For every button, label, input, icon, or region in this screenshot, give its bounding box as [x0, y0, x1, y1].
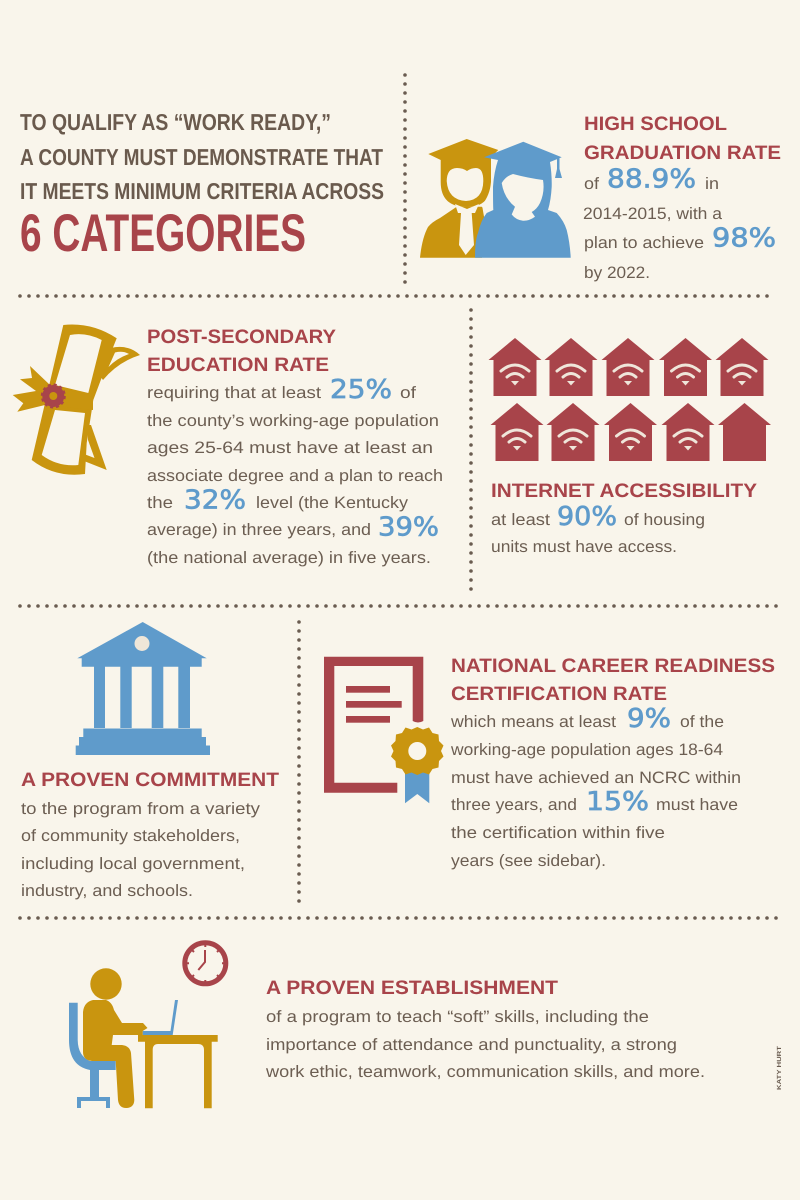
text: a proven establishment: A PROVEN ESTABLISHMENT [266, 977, 558, 999]
text: a proven commitment: including local government, [21, 855, 245, 873]
text: internet accessibility [491, 480, 757, 556]
text: a proven commitment: of community stakeholders, [21, 827, 240, 845]
icon: diploma [13, 325, 140, 475]
text: national career readiness certification rate: years (see sidebar). [451, 852, 606, 870]
text: post-secondary education rate: level (the Kentucky [256, 494, 409, 512]
text: national career readiness certification rate: must have [656, 796, 738, 814]
text: a proven commitment: to the program from a variety [21, 800, 261, 818]
text: national career readiness certification rate: NATIONAL CAREER READINESS [451, 655, 775, 677]
text: high school graduation rate [583, 113, 781, 282]
text: post-secondary education rate: the [147, 494, 173, 512]
icon: houses with wifi [488, 338, 771, 461]
icon: person at desk with clock [69, 943, 226, 1108]
text: high school graduation rate: of [584, 175, 599, 193]
text: post-secondary education rate: average) in three years, and [147, 521, 371, 539]
text: a proven commitment [21, 769, 279, 900]
text: post-secondary education rate: (the national average) in five years. [147, 549, 431, 567]
text: a proven establishment [265, 977, 705, 1081]
text: internet accessibility: INTERNET ACCESSIBILITY [491, 480, 757, 502]
credit: KATY HURT [776, 1046, 783, 1090]
text: internet accessibility: of housing [624, 511, 705, 529]
text: high school graduation rate: 98% [712, 224, 776, 254]
text: internet accessibility: at least [491, 511, 550, 529]
text: post-secondary education rate: ages 25-64 must have at least an [147, 439, 433, 457]
title: 6 CATEGORIES [20, 204, 306, 263]
text: national career readiness certification rate: 15% [586, 787, 649, 817]
text: high school graduation rate: plan to achieve [584, 234, 704, 252]
text: national career readiness certification rate: working-age population ages 18-64 [450, 741, 723, 759]
text: national career readiness certification rate: CERTIFICATION RATE [451, 683, 667, 705]
text: post-secondary education rate: POST-SECONDARY [147, 326, 336, 348]
text: national career readiness certification rate [450, 655, 775, 870]
icon: institution building [76, 622, 210, 755]
title: TO QUALIFY AS “WORK READY,” [20, 109, 331, 135]
text: a proven establishment: importance of attendance and punctuality, a strong [266, 1036, 677, 1054]
text: a proven establishment: of a program to teach “soft” skills, including the [266, 1008, 649, 1026]
text: a proven establishment: work ethic, teamwork, communication skills, and more. [265, 1063, 705, 1081]
text: national career readiness certification rate: which means at least [450, 713, 616, 731]
text: post-secondary education rate: associate degree and a plan to reach [147, 467, 443, 485]
text: national career readiness certification rate: three years, and [451, 796, 577, 814]
text: a proven commitment: industry, and schools. [21, 882, 193, 900]
text: a proven commitment: A PROVEN COMMITMENT [21, 769, 279, 791]
title [20, 109, 384, 263]
text: post-secondary education rate: of [400, 384, 416, 402]
text: national career readiness certification rate: must have achieved an NCRC within [451, 769, 741, 787]
text: post-secondary education rate: requiring that at least [147, 384, 321, 402]
text: national career readiness certification rate: the certification within five [451, 824, 665, 842]
text: post-secondary education rate: EDUCATION RATE [147, 354, 329, 376]
text: post-secondary education rate [147, 326, 443, 567]
text: internet accessibility: 90% [557, 502, 617, 532]
text: high school graduation rate: 88.9% [607, 164, 696, 194]
text: national career readiness certification rate: 9% [627, 704, 671, 734]
text: post-secondary education rate: the county’s working-age population [147, 412, 439, 430]
icon: graduates [420, 139, 571, 258]
icon: certificate [324, 657, 444, 803]
text: high school graduation rate: by 2022. [584, 264, 650, 282]
text: high school graduation rate: in [705, 175, 719, 193]
text: national career readiness certification rate: of the [680, 713, 724, 731]
text: high school graduation rate: HIGH SCHOOL [584, 113, 727, 135]
title: A COUNTY MUST DEMONSTRATE THAT [20, 144, 383, 170]
text: internet accessibility: units must have access. [491, 538, 677, 556]
text: post-secondary education rate: 39% [378, 512, 439, 542]
text: high school graduation rate: 2014-2015, with a [583, 205, 723, 223]
text: post-secondary education rate: 32% [184, 486, 246, 516]
text: high school graduation rate: GRADUATION RATE [584, 142, 781, 164]
text: post-secondary education rate: 25% [330, 375, 392, 405]
title: IT MEETS MINIMUM CRITERIA ACROSS [20, 178, 384, 204]
